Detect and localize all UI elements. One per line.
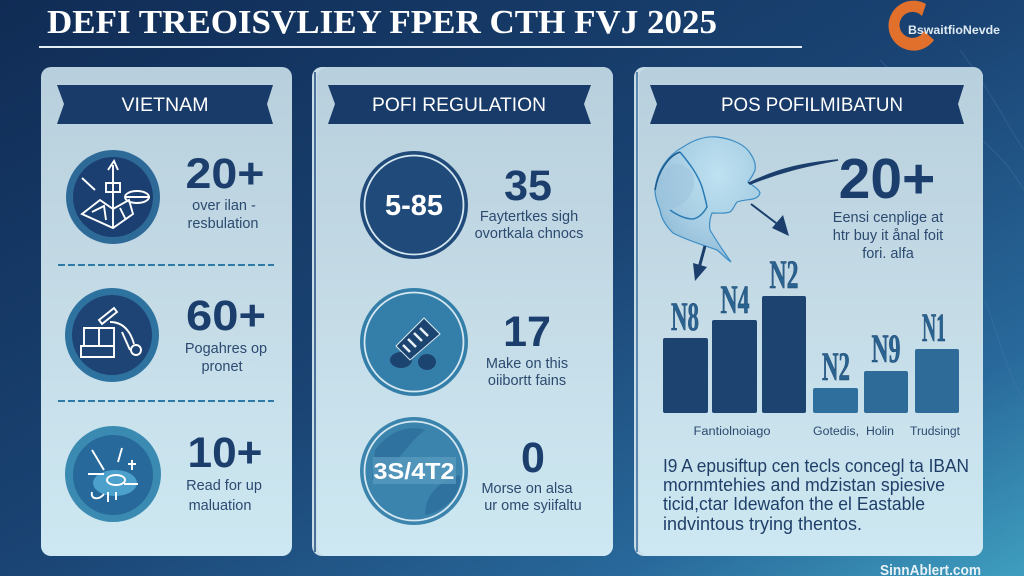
text block: summary: ticid,ctar Idewafon the el Eastable	[663, 494, 925, 514]
icon: boxes and tool	[65, 288, 159, 382]
badge: 5-85	[360, 151, 468, 259]
arrow: head to stat	[749, 160, 838, 184]
panel: DeFi regulation	[312, 67, 613, 556]
heading ribbon: Vietnam	[57, 85, 273, 124]
arrow: head to bar left	[693, 246, 707, 281]
illustration: translucent head	[655, 137, 760, 262]
stat: 20+: resbulation	[188, 216, 258, 232]
stat: 60+: Pogahres op	[185, 341, 267, 357]
bar chart: N2	[822, 344, 850, 389]
stat: 0: 0	[521, 434, 545, 482]
stat: 20+	[186, 150, 264, 232]
panel: Vietnam	[41, 67, 292, 556]
title: DEFI TREOISVLIEY FPER CTH FVJ 2025	[47, 4, 717, 41]
stat: 20+: over ilan -	[192, 198, 256, 214]
badge: 5-85: 5-85	[385, 190, 443, 222]
arrow: head to bar right	[751, 204, 789, 236]
text block: summary: I9 A epusiftup cen tecls concegl ta IBAN	[663, 456, 969, 476]
stat: 35: 35	[504, 162, 552, 210]
stat: 20+: 20+	[839, 147, 935, 211]
stat: 20+: Eensi cenplige at	[833, 210, 943, 226]
bar chart: Holin	[866, 426, 894, 438]
stat: 35	[475, 162, 583, 242]
bar chart: N4	[720, 277, 750, 322]
stat: 17: Make on this	[486, 356, 568, 372]
stat: 20+: 20+	[186, 150, 264, 198]
logo	[889, 1, 1000, 51]
badge: 3S/4T2	[360, 417, 468, 525]
icon: tower and map	[66, 150, 160, 244]
stat: 0: Morse on alsa	[481, 481, 573, 497]
logo: BswaitfioNevde	[908, 25, 1000, 37]
heading ribbon: regulation	[328, 85, 591, 124]
badge: 3S/4T2: 3S/4T2	[374, 458, 454, 484]
text block: summary	[663, 456, 969, 534]
stat: 60+: 60+	[186, 292, 266, 340]
stat: 0: ur ome syiifaltu	[484, 498, 582, 514]
bar chart	[663, 252, 961, 438]
stat: 17	[486, 308, 568, 389]
heading ribbon: POS	[650, 85, 964, 124]
stat: 60+: pronet	[201, 359, 243, 375]
stat: 20+: htr buy it ånal foit	[833, 228, 943, 244]
stat: 35: ovortkala chnocs	[475, 226, 583, 242]
icon: phone	[360, 288, 468, 396]
heading ribbon: POS: POS POFILMIBATUN	[721, 95, 903, 116]
stat: 0	[481, 434, 582, 514]
bar chart: Fantiolnoiago	[694, 426, 770, 438]
stat: 20+	[833, 147, 943, 262]
text block: summary: mornmtehies and mdzistan spiesive	[663, 475, 945, 495]
heading ribbon: regulation: POFI REGULATION	[372, 95, 546, 116]
stat: 10+: Read for up	[186, 478, 262, 494]
bar chart: N8	[671, 294, 699, 339]
stat: 10+: maluation	[189, 498, 251, 514]
bar chart: N2	[770, 252, 798, 297]
bar chart: N1	[922, 305, 946, 350]
bar chart: N9	[872, 326, 900, 371]
heading ribbon: Vietnam: VIETNAM	[122, 95, 208, 116]
stat: 17: oiibortt fains	[488, 373, 566, 389]
bar chart: Trudsingt	[910, 426, 961, 438]
stat: 60+	[185, 292, 267, 375]
stat: 10+: 10+	[188, 429, 262, 477]
stat: 10+	[186, 429, 262, 514]
panel: POS	[634, 67, 983, 556]
icon: network cluster	[65, 426, 161, 522]
text block: summary: indvintous trying thentos.	[663, 514, 862, 534]
bar chart: Gotedis,	[813, 426, 859, 438]
stat: 20+: fori. alfa	[862, 246, 915, 262]
stat: 35: Faytertkes sigh	[480, 209, 578, 225]
stat: 17: 17	[503, 308, 551, 356]
